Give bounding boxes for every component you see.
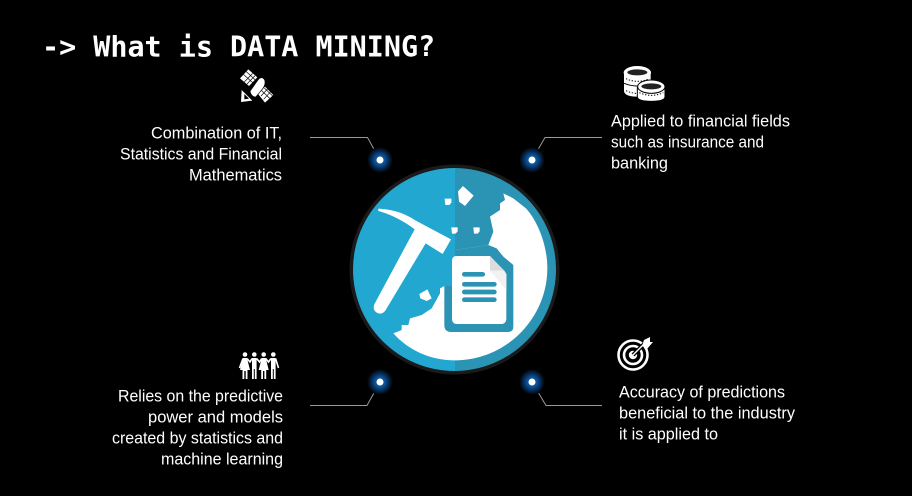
- text: top left: Combination of IT,: [151, 124, 282, 142]
- text: bottom left: created by statistics and: [112, 430, 283, 448]
- icon: target: [618, 337, 653, 370]
- text: top right: such as insurance and: [611, 134, 764, 152]
- text: bottom left: Relies on the predictive: [118, 388, 283, 406]
- icon: people: [240, 352, 278, 379]
- document text lines: [462, 272, 497, 302]
- text: bottom right: it is applied to: [619, 426, 718, 444]
- connector bottom left: [310, 369, 393, 406]
- central data mining emblem: [350, 164, 560, 375]
- text: top left: [120, 124, 282, 184]
- pickaxe: [374, 209, 451, 314]
- text: top left: Statistics and Financial: [120, 146, 282, 164]
- connector bottom right: [519, 369, 602, 406]
- rock fragments: [419, 186, 480, 301]
- text: top left: Mathematics: [189, 166, 282, 184]
- text: bottom right: Accuracy of predictions: [619, 384, 785, 402]
- text: top right: banking: [611, 154, 668, 172]
- text: bottom right: beneficial to the industry: [619, 404, 796, 422]
- text: bottom left: [112, 388, 283, 468]
- document page: [452, 256, 506, 324]
- title: -> What is DATA MINING?: [42, 30, 435, 64]
- text: bottom left: machine learning: [161, 450, 283, 468]
- text: bottom right: [619, 384, 796, 444]
- icon: coins: [624, 66, 665, 101]
- document backing: [444, 245, 513, 332]
- connector top left: [310, 138, 393, 173]
- connector top right: [519, 138, 602, 173]
- mined white rock: [393, 193, 547, 360]
- text: top right: Applied to financial fields: [611, 112, 790, 130]
- icon: satellite: [240, 69, 273, 103]
- text: top right: [611, 112, 790, 172]
- text: bottom left: power and models: [148, 408, 283, 426]
